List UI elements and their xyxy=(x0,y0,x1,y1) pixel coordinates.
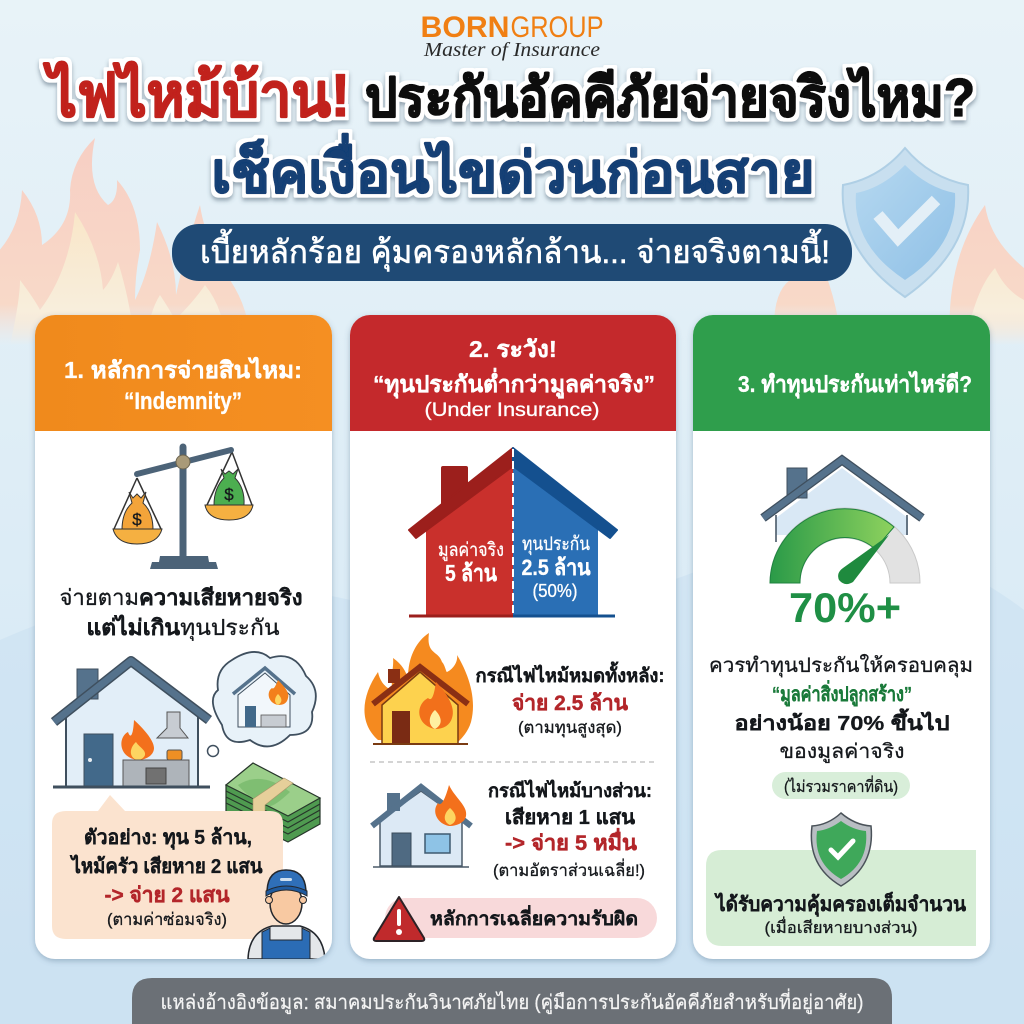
panel header: how much to insure xyxy=(693,315,990,431)
source bar xyxy=(132,978,892,1024)
icon: repair worker xyxy=(248,870,325,959)
text: recommendation: “มูลค่าสิ่งปลูกสร้าง” xyxy=(772,679,912,708)
icon: balance scale with money bags: $ xyxy=(132,510,142,529)
icon: house with gauge at 70% xyxy=(763,460,922,584)
icon: split house value vs insured xyxy=(409,448,617,616)
panel: how much to insure xyxy=(693,315,990,959)
text: recommendation xyxy=(709,654,973,764)
note pill: excludes land xyxy=(772,772,910,799)
title: เช็คเงื่อนไขด่วนก่อนสาย xyxy=(212,133,814,204)
icon: split house value vs insured: 2.5 ล้าน xyxy=(522,555,590,580)
callout: example xyxy=(52,795,283,939)
panel header: under insurance: (Under Insurance) xyxy=(424,400,600,421)
icon: house with kitchen fire xyxy=(53,661,210,787)
text: total loss case: จ่าย 2.5 ล้าน xyxy=(512,691,629,715)
text: payout principle xyxy=(60,585,302,641)
panel: under insurance xyxy=(350,315,676,959)
callout: example: -> จ่าย 2 แสน xyxy=(104,884,230,907)
panel header: indemnity xyxy=(35,315,332,431)
title: ไฟไหม้บ้าน! xyxy=(42,60,350,129)
callout: average clause warning xyxy=(374,897,657,941)
icon: balance scale with money bags: $ xyxy=(224,485,234,504)
icon: split house value vs insured: 5 ล้าน xyxy=(445,560,497,586)
title: ประกันอัคคีภัยจ่ายจริงไหม? xyxy=(365,66,975,128)
note pill: excludes land: (ไม่รวมราคาที่ดิน) xyxy=(784,775,898,796)
callout: full coverage: (เมื่อเสียหายบางส่วน) xyxy=(764,916,918,937)
callout: full coverage: ได้รับความคุ้มครองเต็มจำนวน xyxy=(714,891,966,917)
text: payout principle: จ่ายตามความเสียหายจริง xyxy=(60,585,302,610)
panel header: under insurance: “ทุนประกันต่ำกว่ามูลค่าจริง” xyxy=(373,367,655,399)
title xyxy=(42,60,975,204)
text: partial loss case xyxy=(488,779,652,880)
source bar: แหล่งอ้างอิงข้อมูล: สมาคมประกันวินาศภัยไทย (คู่มือการประกันอัคคีภัยสำหรับที่อยู่อาศัย) xyxy=(160,988,864,1015)
logo: GROUP xyxy=(510,11,604,44)
logo: Master of Insurance xyxy=(423,39,600,61)
logo: BORN xyxy=(420,11,510,44)
text: 70 percent plus: 70%+ xyxy=(789,584,901,631)
panel header: indemnity: “Indemnity” xyxy=(124,388,242,415)
text: recommendation: ควรทำทุนประกันให้ครอบคลุม xyxy=(709,654,973,678)
icon: split house value vs insured: ทุนประกัน xyxy=(522,534,590,556)
icon: split house value vs insured: มูลค่าจริง xyxy=(438,540,504,561)
panel header: indemnity: 1. หลักการจ่ายสินไหม: xyxy=(64,356,302,383)
text: total loss case xyxy=(476,661,664,738)
text: partial loss case: (ตามอัตราส่วนเฉลี่ย!) xyxy=(493,858,645,880)
text: payout principle: แต่ไม่เกินทุนประกัน xyxy=(86,614,280,641)
icon: split house value vs insured: (50%) xyxy=(532,581,578,601)
icon: house with roof fire xyxy=(372,785,471,867)
icon: green check shield xyxy=(811,813,871,886)
text: recommendation: ของมูลค่าจริง xyxy=(780,741,904,764)
callout: average clause warning: หลักการเฉลี่ยความรับผิด xyxy=(430,905,638,930)
callout: full coverage xyxy=(706,850,976,946)
icon: house engulfed in flames xyxy=(364,633,473,744)
icon: balance scale with money bags xyxy=(113,447,253,569)
text: total loss case: กรณีไฟไหม้หมดทั้งหลัง: xyxy=(476,661,664,687)
subtitle pill: เบี้ยหลักร้อย คุ้มครองหลักล้าน... จ่ายจริงตามนี้! xyxy=(200,229,830,272)
subtitle pill xyxy=(172,224,852,281)
text: partial loss case: กรณีไฟไหม้บางส่วน: xyxy=(488,779,652,802)
text: recommendation: อย่างน้อย 70% ขึ้นไป xyxy=(734,708,950,735)
text: partial loss case: -> จ่าย 5 หมื่น xyxy=(505,827,638,855)
callout: example: (ตามค่าซ่อมจริง) xyxy=(107,910,227,929)
logo xyxy=(420,11,604,61)
text: total loss case: (ตามทุนสูงสุด) xyxy=(518,718,622,738)
panel header: under insurance: 2. ระวัง! xyxy=(469,336,557,362)
icon: thought bubble xyxy=(208,652,316,756)
callout: example: ตัวอย่าง: ทุน 5 ล้าน, xyxy=(84,826,252,850)
text: partial loss case: เสียหาย 1 แสน xyxy=(505,806,635,829)
panel header: how much to insure: 3. ทำทุนประกันเท่าไหร่ดี? xyxy=(738,370,972,399)
callout: example: ไหม้ครัว เสียหาย 2 แสน xyxy=(70,854,263,878)
icon: big shield xyxy=(843,148,968,297)
panel header: under insurance xyxy=(350,315,676,431)
icon: banknote stack xyxy=(226,763,320,842)
panel: indemnity xyxy=(35,315,332,959)
